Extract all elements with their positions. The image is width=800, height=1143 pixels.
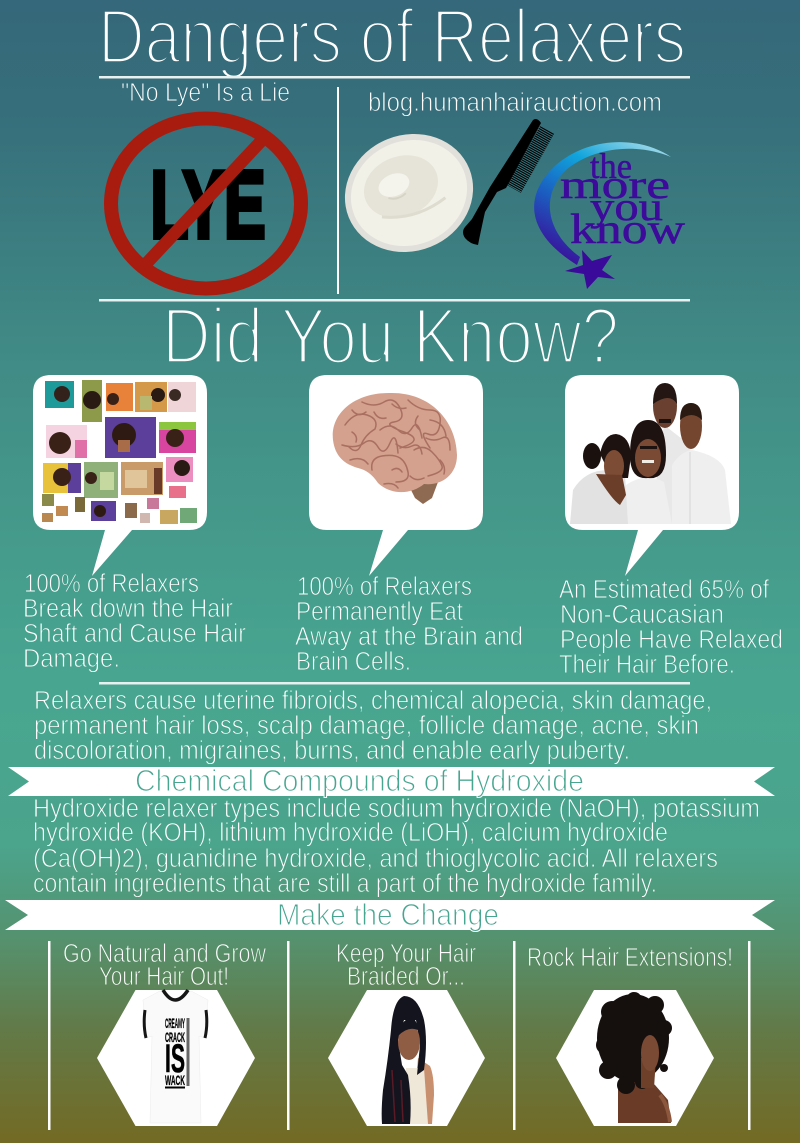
icon: brain xyxy=(333,393,457,504)
banner: chemical compounds: Chemical Compounds of Hydroxide xyxy=(135,763,584,798)
icon: the more you know logo xyxy=(534,142,686,289)
fact 2 text: Permanently Eat xyxy=(296,598,463,626)
text block: hydroxide types xyxy=(33,795,760,898)
panel: brain xyxy=(295,375,523,676)
icon: t-shirt: CREAMY xyxy=(165,1015,185,1031)
text block: effects xyxy=(34,687,712,765)
fact 2 text: Away at the Brain and xyxy=(295,623,523,651)
text block: effects: Relaxers cause uterine fibroids, chemical alopecia, skin damage, xyxy=(34,687,712,715)
icon: t-shirt: WACK xyxy=(165,1072,185,1088)
hexagon 2 xyxy=(328,990,485,1126)
speech bubble 2 xyxy=(309,375,483,576)
fact 3 text: Their Hair Before. xyxy=(559,651,735,679)
icon: lye word: LYE xyxy=(150,152,266,258)
fact 3 text: An Estimated 65% of xyxy=(559,576,770,604)
go natural caption: Go Natural and Grow xyxy=(63,940,266,968)
text block: hydroxide types: contain ingredients that are still a part of the hydroxide family. xyxy=(33,870,657,898)
panel: go natural xyxy=(63,940,266,1126)
fact 1 text: Shaft and Cause Hair xyxy=(23,620,246,648)
braids caption xyxy=(336,940,476,991)
extensions caption: Rock Hair Extensions! xyxy=(527,944,733,972)
speech bubble 3 xyxy=(565,375,739,576)
fact 2 text xyxy=(295,573,523,676)
icon: relaxer cream lid xyxy=(327,115,491,271)
relaxer boxes xyxy=(42,380,197,524)
hexagon 3 xyxy=(556,990,714,1126)
fact 3 text: Non-Caucasian xyxy=(560,601,724,629)
text block: effects: discoloration, migraines, burns, and enable early puberty. xyxy=(34,737,630,765)
banner: chemical compounds xyxy=(8,763,775,798)
panel: hair extensions xyxy=(527,944,733,1126)
braids caption: Keep Your Hair xyxy=(336,940,476,968)
heading: did you know: Did You Know? xyxy=(162,291,619,380)
go natural caption xyxy=(63,940,266,991)
fact 3 text xyxy=(559,576,783,679)
fact 1 text: 100% of Relaxers xyxy=(24,570,199,598)
braids caption: Braided Or... xyxy=(347,963,465,991)
logo text xyxy=(560,146,686,253)
hexagon 1 xyxy=(97,990,255,1126)
icon: t-shirt xyxy=(143,990,208,1123)
go natural caption: Your Hair Out! xyxy=(99,963,229,991)
text block: hydroxide types: Hydroxide relaxer types include sodium hydroxide (NaOH), potassium xyxy=(33,795,760,823)
panel: family xyxy=(559,375,783,679)
logo text: you xyxy=(590,184,663,229)
logo text: know xyxy=(570,207,686,253)
banner: make the change xyxy=(5,897,775,932)
photo: woman with braids xyxy=(382,996,434,1124)
fact 3 text: People Have Relaxed xyxy=(560,626,783,654)
icon: t-shirt: CRACK xyxy=(165,1029,185,1045)
panel: relaxer products xyxy=(23,375,246,673)
panel: braids xyxy=(328,940,485,1126)
fact 1 text xyxy=(23,570,246,673)
logo star xyxy=(565,250,615,289)
caption: no lye: "No Lye" Is a Lie xyxy=(121,79,290,107)
fact 2 text: Brain Cells. xyxy=(296,648,411,676)
panel: no lye xyxy=(111,79,301,288)
logo text: the xyxy=(590,146,632,186)
text block: hydroxide types: hydroxide (KOH), lithium hydroxide (LiOH), calcium hydroxide xyxy=(33,819,668,847)
text block: hydroxide types: (Ca(OH)2), guanidine hydroxide, and thioglycolic acid. All relaxers xyxy=(33,845,718,873)
text block: effects: permanent hair loss, scalp damage, follicle damage, acne, skin xyxy=(34,712,699,740)
fact 1 text: Damage. xyxy=(23,645,120,673)
icon: comb xyxy=(463,119,547,245)
url: blog.humanhairauction.com xyxy=(368,89,662,117)
speech bubble 1 xyxy=(33,375,207,576)
fact 1 text: Break down the Hair xyxy=(23,595,233,623)
icon: prohibition sign xyxy=(111,118,301,288)
photo: woman with afro xyxy=(596,992,672,1123)
banner: make the change: Make the Change xyxy=(277,897,499,932)
logo arc xyxy=(534,142,671,265)
logo text: more xyxy=(560,162,670,207)
photo: family xyxy=(570,383,731,524)
icon: t-shirt: IS xyxy=(165,1037,185,1081)
fact 2 text: 100% of Relaxers xyxy=(297,573,472,601)
